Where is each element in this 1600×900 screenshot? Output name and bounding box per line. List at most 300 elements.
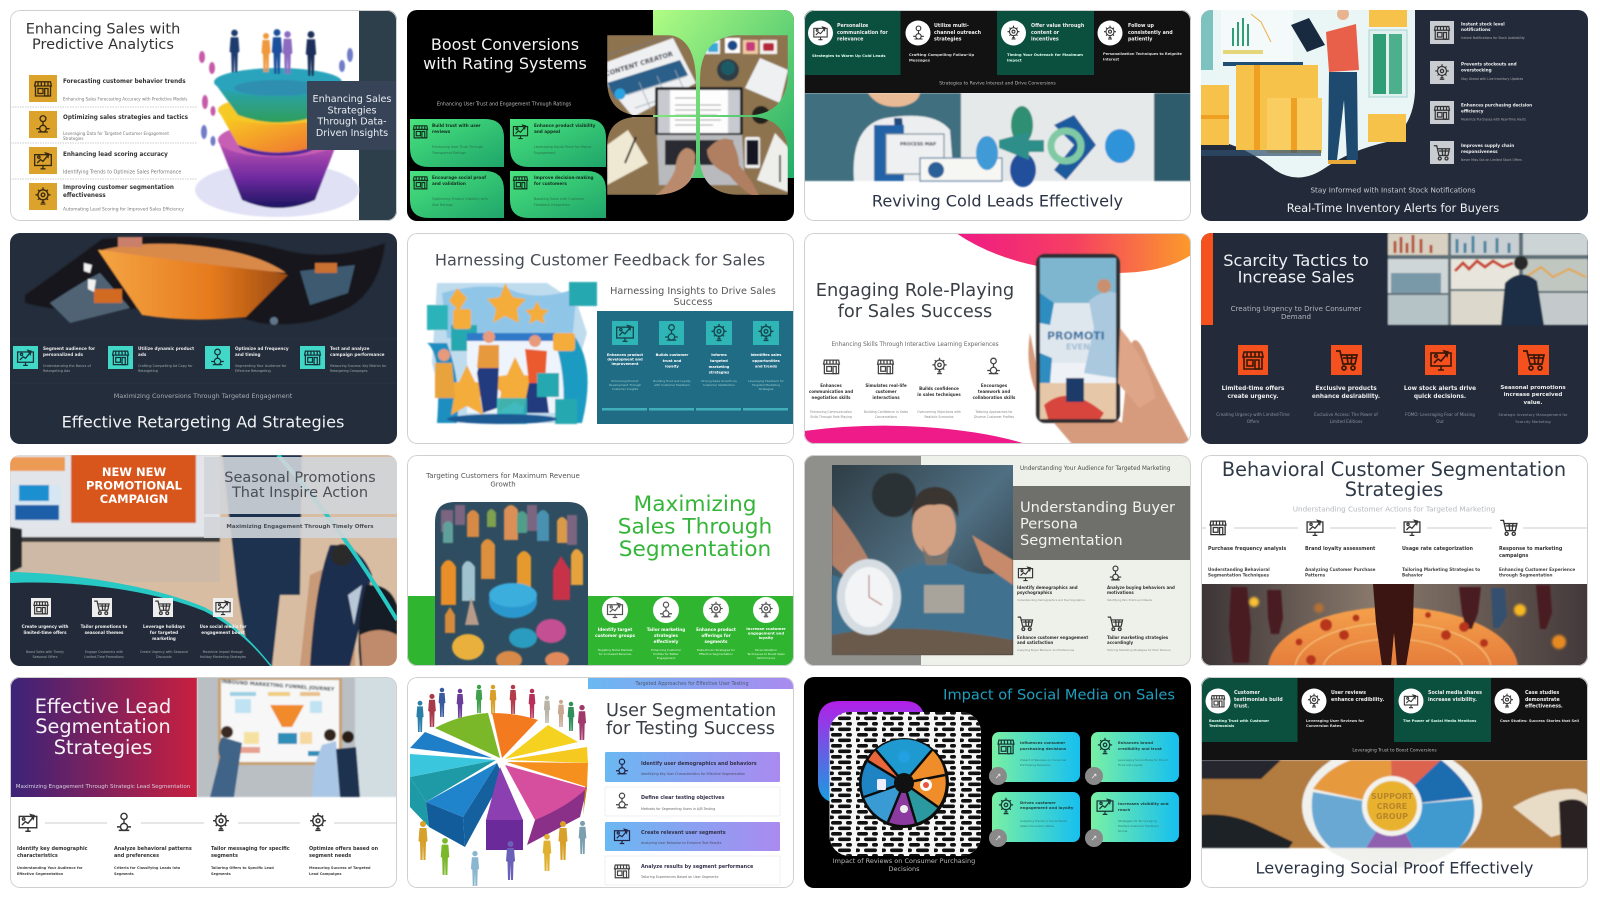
card 4: Feedback Integration bbox=[534, 203, 570, 207]
subtitle: Understanding Customer Actions for Targeted Marketing bbox=[1293, 504, 1495, 514]
title band bbox=[1013, 486, 1191, 560]
column 3: incentives bbox=[1031, 36, 1059, 42]
card 1: ↗ bbox=[995, 772, 1001, 780]
card 1 bbox=[989, 732, 1080, 785]
card 1: purchasing decisions bbox=[1020, 746, 1067, 750]
step 4 bbox=[309, 813, 379, 876]
promo 4: engagement boost bbox=[201, 630, 245, 634]
card 1 bbox=[410, 119, 504, 167]
list item 2: Leveraging Data for Targeted Customer Engagement bbox=[63, 130, 169, 136]
subtitle: Harnessing Insights to Drive Sales bbox=[610, 286, 776, 296]
subtitle: Maximizing Conversions Through Targeted Engagement bbox=[114, 392, 293, 400]
column 3 bbox=[1394, 677, 1491, 742]
benefit 4: Targeted Marketing bbox=[751, 383, 780, 387]
promo 2: Tailor promotions to bbox=[81, 624, 128, 628]
list item 2: Strategies bbox=[63, 136, 83, 140]
step 3: Effective Segmentation bbox=[699, 652, 733, 656]
step 1 bbox=[1208, 521, 1286, 577]
item 4: Measuring Success: Key Metrics for bbox=[330, 364, 387, 368]
tactic 4: increase perceived bbox=[1504, 392, 1562, 398]
column 1: trust. bbox=[1234, 703, 1249, 709]
card 4: Increases visibility and bbox=[1118, 800, 1169, 806]
skill 3: Realistic Scenarios bbox=[925, 415, 954, 419]
benefit 3: Informs bbox=[711, 353, 727, 357]
title: Harnessing Customer Feedback for Sales bbox=[435, 250, 765, 270]
gradient backing shape bbox=[818, 701, 925, 803]
step 2: Tailor marketing bbox=[647, 626, 685, 632]
persona item 1: Understanding Demographics and Psychographics bbox=[1017, 598, 1085, 602]
card 1: Transparent Ratings bbox=[431, 151, 466, 155]
title: Segmentation bbox=[619, 536, 771, 562]
column 2: Crafting Compelling Follow-Up bbox=[909, 52, 974, 56]
step 4: Increase customer bbox=[746, 626, 786, 630]
step 3: Tailoring Offers to Specific Lead bbox=[211, 866, 274, 870]
persona item 4: Tailoring Marketing Strategies for Each Persona bbox=[1106, 648, 1171, 652]
list item 1 bbox=[29, 75, 187, 102]
tactic 2: enhance desirability. bbox=[1312, 394, 1380, 400]
promo 2: seasonal themes bbox=[85, 630, 124, 634]
step 2 bbox=[1305, 520, 1376, 577]
subtitle: Leveraging Trust to Boost Conversions bbox=[1352, 748, 1437, 754]
grey side block bbox=[804, 455, 921, 666]
tactic 1: create urgency. bbox=[1228, 394, 1278, 400]
promo 2 bbox=[81, 598, 128, 659]
column 2: enhance credibility. bbox=[1331, 696, 1384, 702]
photo: glowing segmentation floor bbox=[1201, 584, 1588, 731]
step 3: segments bbox=[704, 638, 728, 644]
benefit 2: Builds customer bbox=[656, 353, 689, 357]
promo 3: Leverage holidays bbox=[143, 624, 186, 628]
card 3: engagement and loyalty bbox=[1020, 804, 1074, 810]
column 1 bbox=[1201, 677, 1298, 742]
persona item 2: Analyze buying behaviors and bbox=[1107, 584, 1175, 590]
step 4: Techniques to Boost Sales bbox=[746, 652, 785, 656]
illustration blob bbox=[1201, 8, 1415, 178]
card 3: and validation bbox=[432, 180, 466, 186]
card 3: Encourage social proof bbox=[432, 174, 486, 180]
alert item 4: Improves supply chain bbox=[1461, 142, 1514, 148]
card 3 bbox=[410, 171, 504, 218]
card 3: Optimizing Product Visibility with bbox=[432, 197, 488, 201]
overlay callout: Strategies bbox=[328, 105, 376, 116]
benefit 4: Leveraging Feedback for bbox=[748, 379, 785, 383]
column 3: The Power of Social Media Mentions bbox=[1403, 719, 1476, 723]
column 1: testimonials build bbox=[1234, 696, 1283, 702]
step 3: offerings for bbox=[701, 632, 732, 638]
item 4: Test and analyze bbox=[330, 346, 370, 350]
item 2: Retargeting bbox=[138, 369, 158, 373]
card 3: Star Ratings bbox=[432, 203, 453, 207]
subtitle: Maximizing Engagement Through Strategic Lead Segmentation bbox=[16, 784, 191, 790]
promo 1: Seasonal Offers bbox=[32, 655, 58, 659]
column 3: Social media shares bbox=[1428, 690, 1482, 696]
slide: Leveraging Social Proof Effectively bbox=[1201, 677, 1588, 888]
promo 4 bbox=[200, 598, 246, 659]
benefit 1: improvement bbox=[611, 362, 639, 366]
subtitle: Strategies to Revive Interest and Drive Conversions bbox=[939, 80, 1056, 86]
step 4: Optimize offers based on bbox=[309, 846, 379, 852]
card 2: Leveraging Social Proof for Higher bbox=[534, 145, 592, 149]
item 3: Optimize ad frequency bbox=[235, 346, 289, 350]
step 3: Enhance product bbox=[696, 626, 736, 632]
slide: Reviving Cold Leads Effectively bbox=[804, 10, 1191, 221]
title: Effective Lead bbox=[35, 694, 171, 718]
column 4 bbox=[1098, 20, 1182, 62]
benefit 3 bbox=[696, 321, 741, 410]
list item 4: Automating Lead Scoring for Improved Sales Efficiency bbox=[63, 206, 184, 212]
benefit 1 bbox=[602, 321, 647, 410]
tactic 4: value. bbox=[1524, 400, 1542, 406]
title: with Rating Systems bbox=[423, 54, 587, 72]
title: Engaging Role-Playing bbox=[816, 280, 1014, 300]
benefit 2: Building Trust and Loyalty bbox=[653, 379, 691, 383]
tactic 4: Seasonal promotions bbox=[1500, 385, 1566, 391]
tactic 3: Out bbox=[1436, 418, 1444, 424]
column 3: increase visibility. bbox=[1428, 696, 1477, 702]
column 1: Testimonials bbox=[1209, 724, 1234, 728]
item 1: Understanding the Basics of bbox=[43, 364, 92, 368]
alert item 1 bbox=[1430, 21, 1525, 44]
card 2: Leveraging Social Media for Brand bbox=[1118, 758, 1168, 762]
promo 4: Use social media for bbox=[200, 624, 246, 628]
benefit 4: opportunities bbox=[752, 359, 780, 363]
card 3: Analyzing User Behavior to Enhance Test Results bbox=[641, 841, 722, 845]
tactic 2: Limited Editions bbox=[1330, 418, 1362, 424]
card 2 bbox=[1085, 732, 1179, 785]
skill 2: interactions bbox=[872, 394, 900, 400]
step 2: Enhancing Customer bbox=[651, 648, 682, 652]
card 2: and appeal bbox=[534, 128, 561, 134]
title: Effective Retargeting Ad Strategies bbox=[62, 412, 344, 432]
step 1: Segmentation Techniques bbox=[1208, 572, 1269, 577]
title band: Understanding Buyer bbox=[1020, 498, 1175, 516]
step 4: Personalization bbox=[755, 648, 777, 652]
benefit 2: trust and bbox=[663, 359, 682, 363]
card 4: reach bbox=[1118, 806, 1130, 812]
card 4: Positive Customer Feedback bbox=[1118, 824, 1159, 828]
step 3: Tailoring Marketing Strategies to bbox=[1402, 566, 1480, 572]
item 4 bbox=[300, 346, 387, 373]
photo: process map: PROCESS MAP bbox=[900, 142, 937, 148]
tactic 3: quick decisions. bbox=[1414, 394, 1466, 400]
card 1: Impact of Reviews on Consumer bbox=[1020, 758, 1067, 762]
item 1: personalized ads bbox=[43, 352, 84, 356]
persona item 4 bbox=[1106, 617, 1171, 652]
slide: Impact of Social Media on Sales bbox=[804, 677, 1191, 888]
item 4: campaign performance bbox=[330, 352, 385, 356]
step 3 bbox=[1402, 520, 1480, 577]
column 1 bbox=[804, 10, 900, 75]
tactic 2 bbox=[1312, 345, 1380, 424]
card 3: Analyzing Trends in Social Media bbox=[1020, 819, 1067, 823]
skill 2: Conversations bbox=[875, 415, 897, 419]
tactic 3: Low stock alerts drive bbox=[1404, 386, 1476, 392]
subtitle box: Maximizing Engagement Through Timely Offers bbox=[226, 524, 374, 530]
slide: Engaging Role-Playing for Sales Success bbox=[804, 233, 1191, 444]
photo: process map bbox=[804, 93, 1191, 187]
subtitle: Enhancing User Trust and Engagement Through Ratings bbox=[437, 102, 572, 108]
photo: segmented markers bbox=[435, 502, 588, 669]
step 2: Brand loyalty assessment bbox=[1305, 546, 1376, 552]
column 1: relevance bbox=[837, 36, 864, 42]
step 4: Performance bbox=[757, 656, 775, 660]
step 4: Enhancing Customer Experience bbox=[1499, 566, 1575, 572]
top banner bbox=[588, 678, 794, 689]
step 2: Patterns bbox=[1305, 572, 1326, 577]
step 2: and preferences bbox=[114, 853, 159, 859]
step 2: Analyzing Customer Purchase bbox=[1305, 566, 1376, 572]
caption: Impact of Reviews on Consumer Purchasing bbox=[833, 857, 975, 865]
subtitle: Targeting Customers for Maximum Revenue bbox=[425, 472, 580, 480]
skill 1: Enhances bbox=[820, 382, 842, 388]
step 1: Identify key demographic bbox=[17, 846, 88, 852]
card 2 bbox=[510, 119, 606, 167]
title: Enhancing Sales with bbox=[26, 22, 180, 38]
bottom wave bbox=[804, 426, 1026, 444]
tactic 1: Creating Urgency with Limited-Time bbox=[1216, 412, 1290, 416]
promo 1: limited-time offers bbox=[23, 630, 67, 634]
tactic 4 bbox=[1498, 345, 1568, 424]
step 1: Understanding Your Audience for bbox=[17, 866, 83, 870]
card 4: Analyze results by segment performance bbox=[641, 864, 754, 870]
slide: Understanding Buyer Persona Segmentation bbox=[804, 455, 1191, 666]
alert item 3 bbox=[1430, 101, 1532, 124]
card 3: Create relevant user segments bbox=[641, 830, 726, 836]
step 3: Usage rate categorization bbox=[1402, 546, 1473, 552]
card 4: Tailoring Experiences Based on User Segments bbox=[640, 875, 719, 879]
card 4: Boosting Sales with Customer bbox=[534, 197, 585, 201]
step 3: Tailor messaging for specific bbox=[211, 846, 290, 852]
swoosh photo with orange bowl bbox=[25, 237, 385, 325]
step 1: characteristics bbox=[17, 853, 58, 859]
benefit 1: Enhances product bbox=[607, 353, 643, 357]
subtitle box bbox=[204, 517, 397, 538]
phone in hand bbox=[1028, 254, 1191, 444]
slide: Enhancing Sales with Predictive Analytics bbox=[10, 10, 397, 221]
phone in hand: PROMOTI bbox=[1047, 330, 1105, 342]
card 2: Enhances brand bbox=[1118, 740, 1153, 744]
column 4: patiently bbox=[1128, 36, 1153, 42]
benefit 2 bbox=[649, 321, 694, 410]
skill 1: negotiation skills bbox=[812, 394, 851, 400]
tactic 1 bbox=[1216, 345, 1290, 424]
list item 4 bbox=[29, 183, 184, 212]
card 4 bbox=[605, 856, 780, 885]
persona item 2: Identifying Pain Points and Needs bbox=[1107, 598, 1152, 602]
step 1: Identify target bbox=[598, 626, 632, 632]
skill 2 bbox=[864, 360, 908, 419]
alert item 2 bbox=[1430, 61, 1524, 84]
teal band bbox=[10, 572, 272, 666]
slide: Effective Retargeting Ad Strategies bbox=[10, 233, 397, 444]
teal arc bbox=[278, 455, 397, 620]
card 1: Identify user demographics and behaviors bbox=[641, 761, 757, 767]
dotted panel with social wheel bbox=[830, 712, 981, 856]
slide: Boost Conversions with Rating Systems bbox=[407, 10, 794, 221]
benefit 4: and trends bbox=[755, 364, 777, 368]
alert item 3: Maximize Purchases with Real-Time Alerts bbox=[1461, 118, 1526, 122]
side panel bbox=[359, 10, 397, 221]
step 4: Measuring Success of Targeted bbox=[309, 866, 371, 870]
skill 4: collaboration skills bbox=[973, 394, 1016, 400]
benefit 3: Driving Sales Growth via bbox=[701, 379, 737, 383]
skill 2: Simulates real-life bbox=[865, 382, 907, 388]
column 4 bbox=[1494, 688, 1579, 723]
title: Boost Conversions bbox=[431, 34, 579, 54]
item 3: Segmenting Your Audience for bbox=[235, 364, 287, 368]
tactic 3: FOMO: Leveraging Fear of Missing bbox=[1405, 412, 1475, 416]
photo: funnel whiteboard bbox=[197, 677, 397, 797]
benefit 2: loyalty bbox=[665, 364, 680, 368]
slide: Leveraging Social Proof Effectively: CRORE bbox=[1377, 802, 1407, 810]
poster text: NEW NEW bbox=[102, 465, 166, 479]
slide: Effective Lead Segmentation Strategies bbox=[10, 677, 397, 888]
skill 4: Encourages bbox=[981, 382, 1008, 388]
promo 3: for targeted bbox=[150, 630, 178, 634]
orange accent bar bbox=[1201, 233, 1213, 325]
step 1: for Increased Revenue bbox=[599, 652, 631, 656]
column 2: channel outreach bbox=[934, 30, 982, 36]
step 2: Analyze behavioral patterns bbox=[114, 846, 192, 852]
alert item 4 bbox=[1430, 141, 1522, 164]
skill 1: communication and bbox=[809, 388, 853, 394]
item 2: ads bbox=[138, 352, 147, 356]
step 2: Criteria for Classifying Leads into bbox=[114, 866, 181, 870]
column 2: strategies bbox=[934, 36, 962, 42]
card 2: Engagement bbox=[534, 151, 556, 155]
benefit 3: Customer Satisfaction bbox=[703, 383, 735, 387]
phone in hand: EVEN bbox=[1066, 342, 1090, 352]
benefit 1: Customer Insights bbox=[612, 387, 639, 391]
card 4: Strategies for Encouraging bbox=[1118, 819, 1157, 823]
slide: Seasonal Promotions That Inspire Action bbox=[10, 455, 397, 666]
clover photo: CONTENT CREATOR bbox=[604, 50, 674, 78]
title: Real-Time Inventory Alerts for Buyers bbox=[1287, 201, 1499, 215]
card 4: Online bbox=[1118, 829, 1128, 833]
alert item 3: efficiency bbox=[1461, 108, 1484, 113]
photo: buyer with clock bbox=[832, 465, 1013, 655]
subtitle: Stay Informed with Instant Stock Notifications bbox=[1310, 186, 1476, 194]
funnel illustration bbox=[195, 29, 359, 217]
column 1: Customer bbox=[1234, 690, 1261, 696]
slide: Leveraging Social Proof Effectively: SUPPORT bbox=[1371, 792, 1414, 800]
poster text: CAMPAIGN bbox=[100, 492, 168, 506]
card 1: Influences consumer bbox=[1020, 740, 1065, 744]
skill 3: in sales techniques bbox=[917, 392, 961, 396]
benefit 1: Development Through bbox=[609, 383, 641, 387]
skill 4 bbox=[973, 358, 1016, 419]
title: Increase Sales bbox=[1238, 267, 1354, 286]
card 1: reviews bbox=[432, 128, 451, 134]
list item 4: Improving customer segmentation bbox=[63, 185, 174, 191]
skill 1 bbox=[809, 360, 853, 419]
overlay callout: Through Data- bbox=[316, 116, 387, 127]
column 1: communication for bbox=[837, 30, 888, 36]
skill 2: customer bbox=[875, 388, 897, 394]
title: Reviving Cold Leads Effectively bbox=[872, 192, 1124, 210]
item 2 bbox=[108, 346, 194, 373]
step 2: Engagement bbox=[657, 656, 676, 660]
column 2 bbox=[906, 20, 982, 62]
column 4: demonstrate bbox=[1525, 696, 1560, 702]
column 4: Follow up bbox=[1128, 22, 1154, 28]
card 1 bbox=[605, 752, 780, 782]
column 1: Strategies to Warm Up Cold Leads bbox=[812, 53, 886, 58]
step 4 bbox=[746, 597, 786, 660]
card 2 bbox=[605, 787, 780, 816]
card 4: ↗ bbox=[1091, 834, 1097, 842]
alert item 2: overstocking bbox=[1461, 67, 1492, 72]
overlay callout bbox=[307, 81, 397, 150]
promo 2: Engage Customers with bbox=[85, 650, 123, 654]
overlay callout: Enhancing Sales bbox=[313, 94, 391, 104]
card 2: Define clear testing objectives bbox=[641, 795, 725, 801]
alert item 4: responsiveness bbox=[1461, 148, 1498, 154]
tactic 4: Strategic Inventory Management for bbox=[1498, 412, 1568, 416]
step 4: Lead Campaigns bbox=[309, 872, 341, 876]
feedback illustration bbox=[427, 282, 597, 424]
item 3 bbox=[205, 346, 289, 373]
column 3: Timing Your Outreach for Maximum bbox=[1007, 52, 1083, 56]
step 1: Purchase frequency analysis bbox=[1208, 546, 1286, 552]
promo 3: marketing bbox=[152, 636, 176, 640]
benefit 4 bbox=[743, 321, 788, 410]
title: Impact of Social Media on Sales bbox=[943, 686, 1175, 704]
slide: Behavioral Customer Segmentation Strategies bbox=[1201, 455, 1588, 666]
list item 2 bbox=[29, 111, 189, 140]
promo 1 bbox=[22, 598, 69, 659]
alert item 2: Stay Ahead with Live Inventory Updates bbox=[1461, 77, 1524, 81]
card 2: Enhance product visibility bbox=[534, 122, 596, 128]
subtitle: Enhancing Skills Through Interactive Learning Experiences bbox=[831, 342, 999, 348]
green band bbox=[407, 596, 794, 666]
column 3: Offer value through bbox=[1031, 22, 1085, 28]
title: for Sales Success bbox=[838, 300, 992, 322]
card 2: ↗ bbox=[1091, 772, 1097, 780]
title: Predictive Analytics bbox=[32, 37, 174, 53]
skill 3 bbox=[917, 358, 961, 419]
list item 3 bbox=[29, 147, 181, 176]
slide: Leveraging Social Proof Effectively: GROUP bbox=[1376, 812, 1408, 820]
gradient title block bbox=[10, 677, 197, 797]
persona item 4: Tailor marketing strategies bbox=[1107, 634, 1169, 640]
persona item 3: Enhance customer engagement bbox=[1017, 634, 1088, 640]
step 2: effectively bbox=[654, 638, 679, 644]
skill 4: Diverse Customer Profiles bbox=[974, 415, 1014, 419]
persona item 3 bbox=[1017, 617, 1088, 652]
slide: User Segmentation for Testing Success bbox=[407, 677, 794, 888]
title band: Persona bbox=[1020, 515, 1078, 532]
title box: That Inspire Action bbox=[231, 485, 368, 501]
step 4: loyalty bbox=[759, 634, 774, 640]
item 4: Retargeting Campaigns bbox=[330, 369, 368, 373]
card 1: Identifying Key User Characteristics for Effective Segmentation bbox=[641, 772, 745, 776]
persona item 3: Analyzing Buyer Behavior and Preferences bbox=[1017, 648, 1075, 652]
title box: Seasonal Promotions bbox=[224, 470, 376, 486]
tactic 4: Scarcity Marketing bbox=[1515, 418, 1551, 424]
card 1: Enhancing User Trust Through bbox=[432, 145, 483, 149]
title: Leveraging Social Proof Effectively bbox=[1256, 858, 1534, 878]
slide: Scarcity Tactics to Increase Sales bbox=[1201, 233, 1588, 444]
step 4: Response to marketing bbox=[1499, 546, 1563, 552]
title: Sales Through bbox=[618, 514, 772, 539]
persona item 3: and satisfaction bbox=[1017, 640, 1053, 644]
step 4: through Segmentation bbox=[1499, 572, 1553, 577]
title: Scarcity Tactics to bbox=[1223, 250, 1369, 270]
promo 1: Create urgency with bbox=[22, 624, 69, 628]
title band: Segmentation bbox=[1020, 532, 1123, 548]
item 2: Utilize dynamic product bbox=[138, 346, 194, 350]
